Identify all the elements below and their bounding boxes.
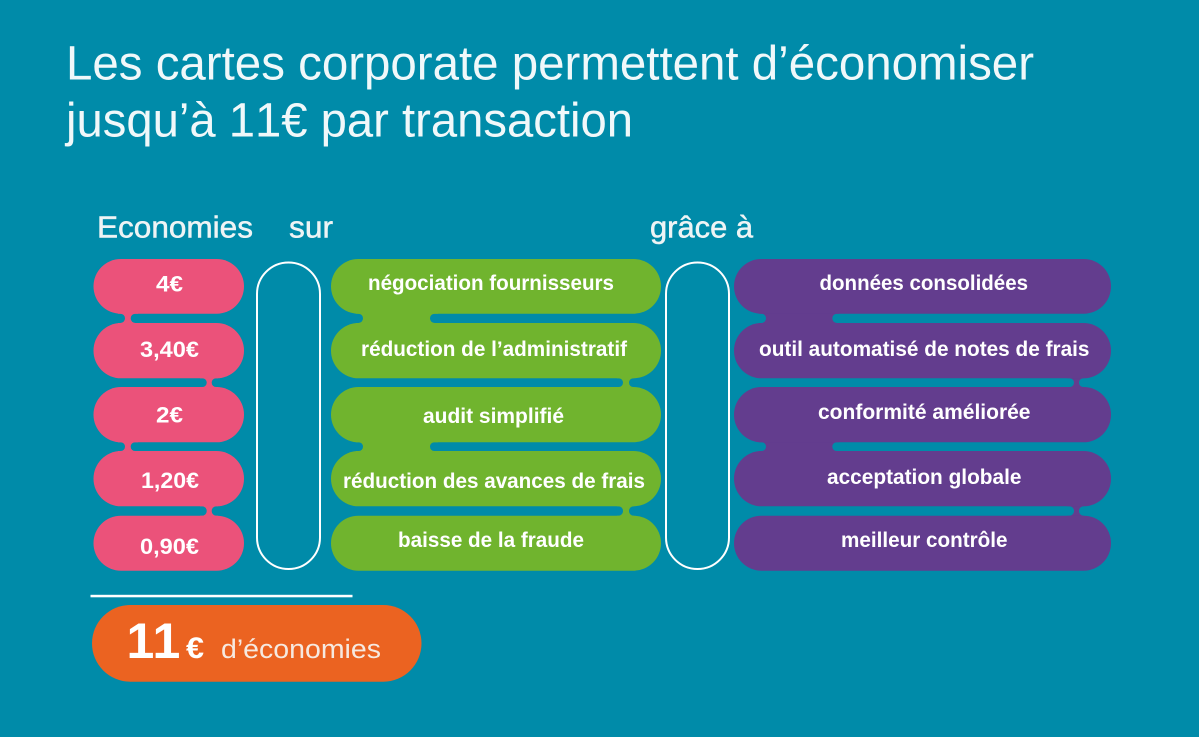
category: réduction des avances de frais: réduction des avances de frais [343,470,645,493]
total callout: 11€ d’économies: 11 [126,613,180,669]
amount: 0,90€ [94,516,244,571]
benefit: données consolidées: données consolidées [820,272,1028,295]
category: audit simplifié [331,387,661,442]
pink connectors [110,312,226,517]
left outline capsule [257,262,320,569]
benefit: acceptation globale: acceptation globale [827,466,1022,489]
amount: 1,20€ [94,451,244,506]
amount: 4€ [94,259,244,314]
benefit: meilleur contrôle: meilleur contrôle [841,529,1008,552]
column headings: sur [289,210,333,244]
amount: 1,20€: 1,20€ [141,468,199,493]
benefit: outil automatisé de notes de frais: outil automatisé de notes de frais [759,338,1090,361]
category: négociation fournisseurs [331,259,661,314]
amount: 0,90€: 0,90€ [140,534,199,559]
category: réduction des avances de frais [331,451,661,506]
panel: savings amounts [94,259,244,571]
benefit: acceptation globale [734,451,1111,506]
purple connectors [752,312,1093,517]
total callout: 11€ d’économies: d’économies [221,634,381,664]
benefit: outil automatisé de notes de frais [734,323,1111,378]
panel: benefits [734,259,1111,571]
total rule [90,595,352,597]
title [64,37,1034,148]
amount: 2€ [94,387,244,442]
column headings: grâce à [650,210,753,244]
category: réduction de l’administratif: réduction de l’administratif [361,338,628,361]
category: réduction de l’administratif [331,323,661,378]
panel: savings categories [331,259,661,571]
right outline capsule [666,262,729,569]
total callout: 11€ d’économies [92,605,422,682]
category: audit simplifié: audit simplifié [423,405,564,428]
amount: 3,40€: 3,40€ [140,337,199,362]
amount: 2€: 2€ [156,403,183,428]
benefit: conformité améliorée: conformité améliorée [818,401,1030,424]
green connectors [349,312,643,517]
benefit: conformité améliorée [734,387,1111,442]
title: Les cartes corporate permettent d’économiser [66,37,1034,90]
column headings [97,210,753,244]
category: négociation fournisseurs: négociation fournisseurs [368,272,614,295]
title: jusqu’à 11€ par transaction [64,94,633,148]
amount: 3,40€ [94,323,244,378]
benefit: meilleur contrôle [734,516,1111,571]
amount: 4€: 4€ [156,272,183,297]
total callout: 11€ d’économies: € [186,632,204,665]
category: baisse de la fraude [331,516,661,571]
column headings: Economies [97,210,253,244]
benefit: données consolidées [734,259,1111,314]
category: baisse de la fraude: baisse de la fraude [398,529,584,552]
